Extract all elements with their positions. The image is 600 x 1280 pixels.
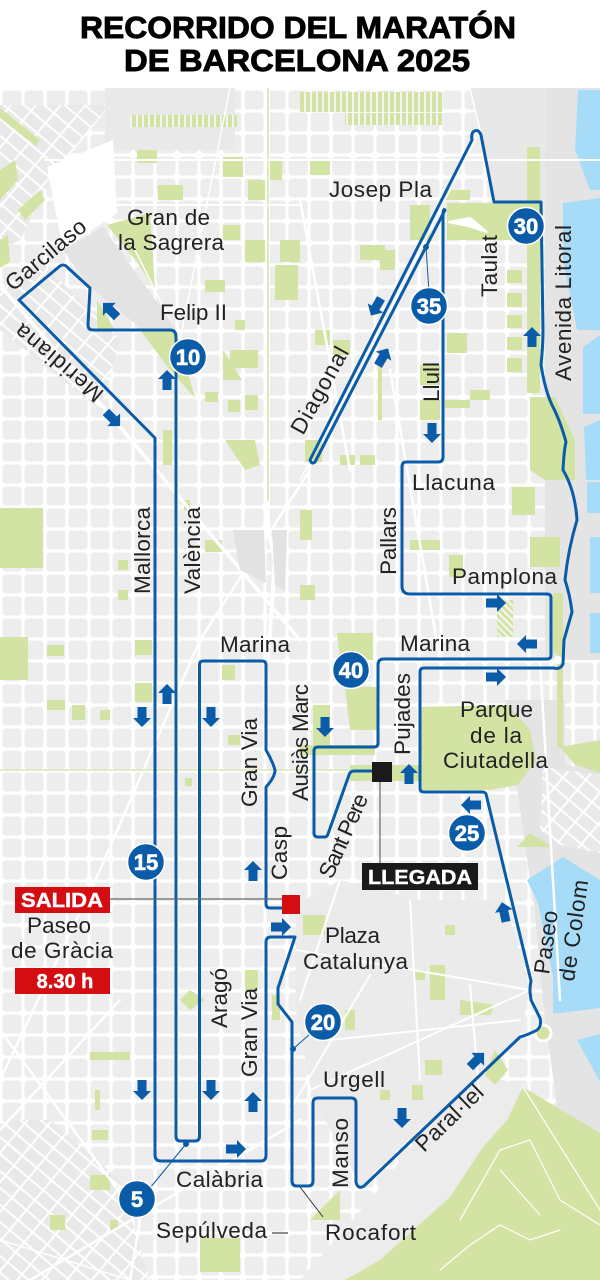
water (563, 198, 600, 480)
street labels: Catalunya (303, 949, 408, 974)
station area (47, 140, 117, 250)
street labels: Ausiàs Marc (288, 684, 313, 801)
street labels: Marina (220, 632, 290, 657)
start marker: 8.30 h (37, 971, 93, 993)
street labels: Marina (400, 631, 470, 656)
start marker: Paseo (27, 913, 91, 938)
street labels: Avenida Litoral (551, 225, 576, 381)
street labels: Garcilaso (0, 214, 91, 296)
street labels: Mallorca (130, 507, 155, 594)
street labels: Taulat (477, 234, 502, 297)
title: DE BARCELONA 2025 (124, 43, 470, 78)
kilometre markers: 5 (131, 1187, 143, 1212)
start marker: de Gràcia (11, 938, 113, 963)
street labels: Pamplona (452, 564, 557, 589)
finish marker: LLEGADA (368, 867, 472, 889)
kilometre markers: 10 (176, 345, 200, 370)
roundabouts (535, 1025, 551, 1041)
street labels: Paseo (529, 909, 563, 976)
street labels: Calàbria (176, 1167, 263, 1192)
street labels: Parque (460, 697, 533, 722)
title: RECORRIDO DEL MARATÓN (80, 9, 516, 45)
street labels: de Colom (554, 878, 593, 983)
start marker (11, 887, 300, 994)
thin leader lines (150, 244, 429, 1188)
kilometre markers (118, 208, 544, 1218)
street labels: Rocafort (325, 1220, 417, 1245)
street labels: Gran Via (237, 988, 262, 1077)
kilometre markers: 35 (417, 294, 441, 319)
kilometre markers: 25 (455, 821, 479, 846)
title (80, 9, 516, 78)
street labels: Diagonal (286, 342, 354, 438)
kilometre markers: 20 (311, 1010, 335, 1035)
street labels: Paral·lel (410, 1080, 489, 1157)
callout line to Rocafort (300, 1187, 323, 1217)
route line (19, 131, 577, 1187)
street labels: Meridiana (9, 318, 108, 407)
street labels: Sant Pere (314, 790, 373, 882)
dash by Sepúlveda (272, 1232, 288, 1234)
kilometre markers: 15 (134, 850, 158, 875)
street labels: Llull (419, 362, 444, 402)
street labels: de la (470, 723, 522, 748)
street labels: Sepúlveda (156, 1218, 267, 1243)
kilometre markers: 30 (514, 214, 538, 239)
street labels: Josep Pla (329, 177, 432, 202)
street labels: Aragó (207, 968, 232, 1028)
street labels: Ciutadella (443, 748, 548, 773)
street labels: Gran Via (237, 718, 262, 807)
street labels: Felip II (160, 300, 227, 325)
Glòries square (233, 530, 287, 590)
finish marker (362, 762, 478, 890)
start marker: SALIDA (21, 890, 103, 912)
street labels: Plaza (325, 923, 380, 948)
street labels: la Sagrera (118, 230, 224, 255)
street labels: Manso (328, 1118, 353, 1188)
street labels: Urgell (323, 1067, 385, 1092)
irregular districts (296, 880, 530, 1185)
street labels: Pujades (390, 673, 415, 755)
street labels: Pallars (376, 507, 401, 575)
street labels: València (180, 507, 205, 594)
kilometre markers: 40 (339, 658, 363, 683)
direction arrows (97, 294, 541, 1158)
street labels: Casp (267, 826, 292, 880)
street labels: Llacuna (412, 470, 495, 495)
street labels: Gran de (127, 205, 210, 230)
